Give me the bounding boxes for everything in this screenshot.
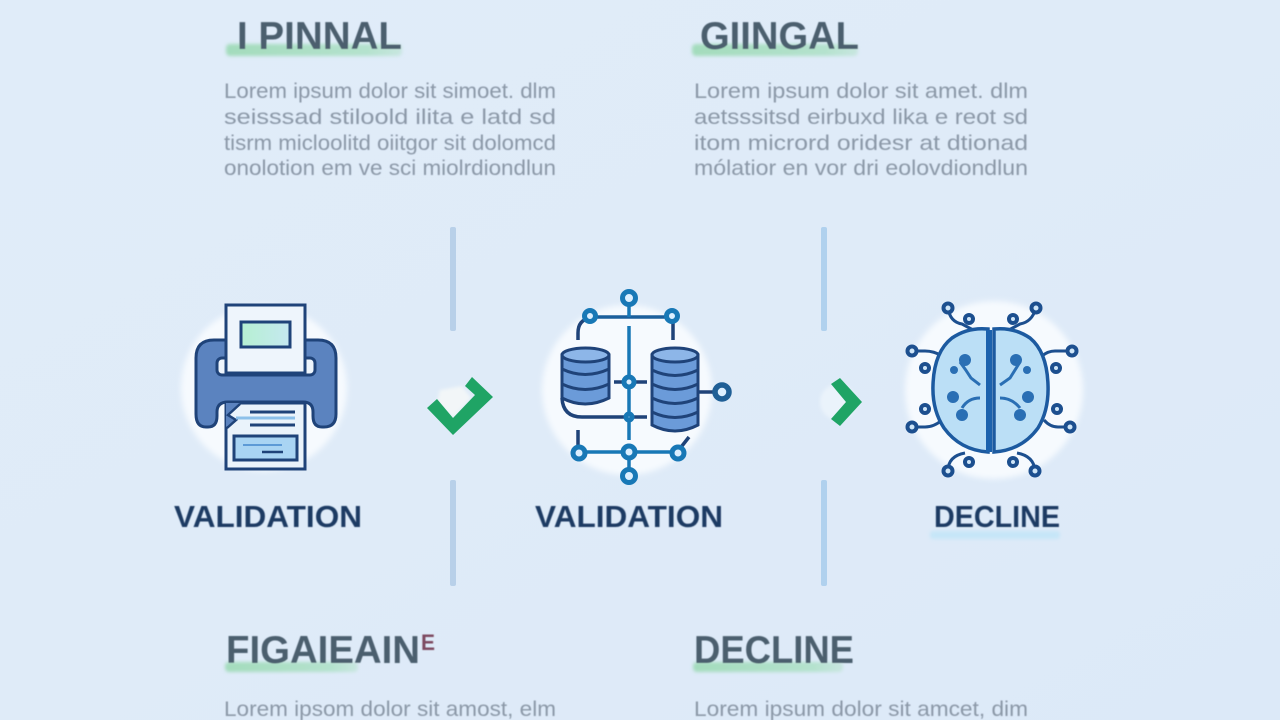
heading: I PINNAL: I PINNAL [237, 15, 402, 58]
text block: top right body [694, 80, 1028, 180]
panel: top left text [224, 15, 556, 180]
printer output sheet [226, 403, 305, 469]
icon: green check [427, 377, 493, 435]
circuit wires [912, 308, 1072, 471]
text block: top left body: Lorem ipsum dolor sit simoet. dlm [224, 80, 556, 103]
network lines [562, 304, 714, 470]
label: VALIDATION left: VALIDATION [174, 499, 362, 534]
brain inner circuits [960, 362, 1020, 408]
icon: green chevron [820, 378, 862, 426]
heading: DECLINE: DECLINE [694, 629, 854, 672]
heading superscript mark: E [421, 630, 435, 655]
text block: top left body [224, 80, 556, 180]
icon: databases network [542, 292, 729, 482]
heading: FIGAIEAIN: FIGAIEAIN [226, 629, 420, 672]
text block: top left body: seisssad stiloold ilita e latd sd [224, 106, 556, 129]
heading: GIINGAL: GIINGAL [700, 15, 859, 58]
network nodes [573, 292, 729, 482]
outer nodes [908, 304, 1076, 476]
right database [652, 348, 698, 431]
panel: bottom left text [224, 629, 556, 720]
left hemisphere [933, 329, 988, 452]
text block: top right body: mólatior en vor dri eolovdiondlun [694, 157, 1028, 180]
text block: top left body: onolotion em ve sci miolrdiondlun [224, 157, 556, 180]
text block: top right body: itom micrord oridesr at dtionad [694, 132, 1028, 155]
text block: top right body: Lorem ipsum dolor sit amet. dlm [694, 80, 1028, 103]
icon: brain circuit [905, 301, 1083, 479]
text block: top right body: aetsssitsd eirbuxd lika e reot sd [694, 106, 1028, 129]
panel: bottom right text [693, 629, 1028, 720]
panel: top right text [692, 15, 1028, 180]
printer top paper [226, 305, 305, 373]
label: VALIDATION center: VALIDATION [535, 499, 723, 534]
label: DECLINE center: DECLINE [934, 499, 1060, 534]
left database [562, 348, 609, 404]
right hemisphere [994, 329, 1048, 452]
text block: top left body: tisrm micloolitd oiitgor sit dolomcd [224, 132, 556, 155]
icon: printer [181, 305, 347, 471]
